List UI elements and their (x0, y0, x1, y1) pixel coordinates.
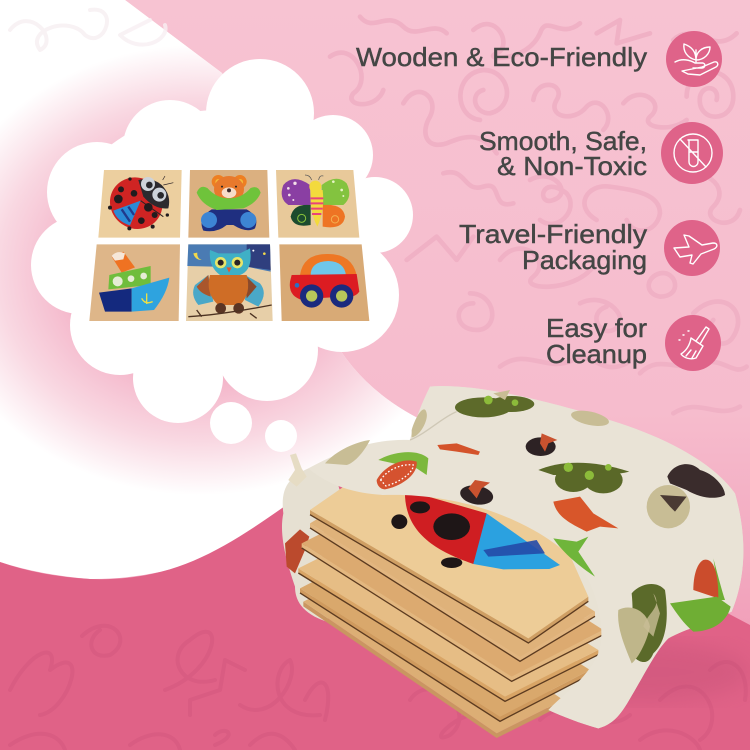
feature: easy for cleanup (546, 313, 721, 371)
bag shadow (530, 642, 750, 702)
wooden stack (298, 447, 603, 738)
puzzle: butterfly (276, 170, 359, 238)
label: easy for cleanup: Easy for (546, 313, 647, 343)
puzzle: boat (89, 244, 180, 321)
top board ladybug piece (391, 490, 560, 569)
label: smooth, safe and non-toxic: Smooth, Safe, (479, 126, 647, 156)
cloth bag left side (282, 468, 357, 622)
thought cloud (31, 59, 413, 452)
print: mushrooms (437, 433, 557, 507)
feature: wooden and eco-friendly (356, 31, 722, 87)
cloth bag front flap (308, 386, 743, 728)
print: bear face (667, 464, 725, 498)
print: left strawberry (285, 529, 309, 573)
flap fold line (410, 412, 457, 440)
print: strawberries (377, 452, 731, 632)
feature: smooth, safe and non-toxic (479, 122, 723, 184)
icon: airplane (664, 220, 720, 276)
feature: travel-friendly packaging (459, 219, 720, 276)
label: travel-friendly packaging: Travel-Friendly (459, 219, 647, 249)
print: critter on khaki circle (660, 495, 687, 512)
print: green sprig (553, 537, 595, 577)
label: travel-friendly packaging: Packaging (522, 245, 647, 275)
puzzle: owl (186, 244, 273, 321)
cloth bag back (410, 386, 743, 728)
label: smooth, safe and non-toxic: & Non-Toxic (497, 151, 647, 181)
drawstring knot right (595, 697, 617, 727)
print: fox (553, 497, 618, 532)
print: trees (455, 390, 667, 663)
label: easy for cleanup: Cleanup (546, 339, 647, 369)
puzzle boards inside cloud (89, 167, 369, 321)
label: wooden and eco-friendly: Wooden & Eco-Friendly (356, 42, 647, 72)
background: white fading blob (0, 0, 560, 579)
icon: broom (665, 315, 721, 371)
icon: crossed-out test tube (661, 122, 723, 184)
puzzle: bear (188, 170, 269, 238)
icon: hand holding plant (666, 31, 722, 87)
puzzle: car (279, 244, 369, 321)
print: khaki patches (325, 408, 690, 528)
background: dark pink floor (0, 440, 750, 750)
drawstring knot left (288, 453, 307, 487)
product: wooden puzzles in cloth bag (282, 386, 743, 738)
puzzle: ladybug (98, 167, 182, 239)
